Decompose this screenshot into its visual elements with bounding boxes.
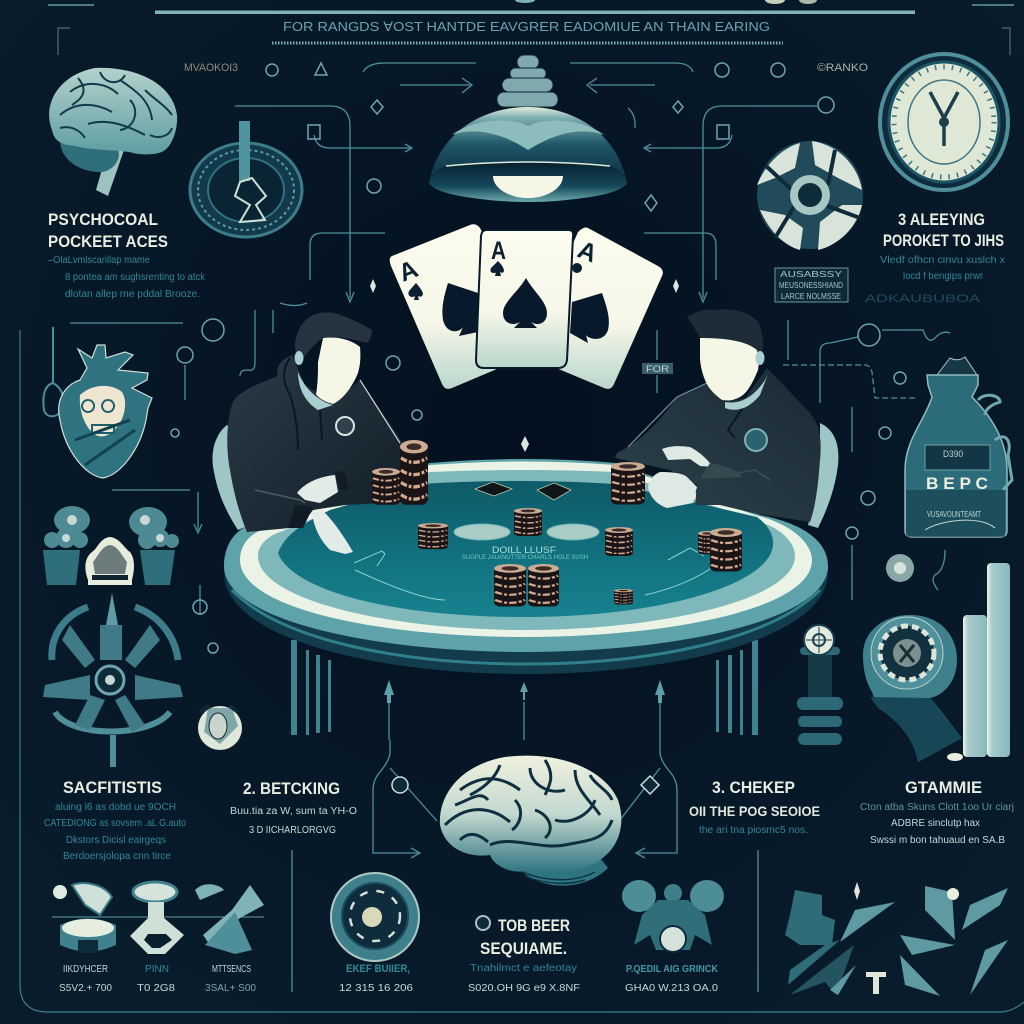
- text block: gtammie: Swssi m bon tahuaud en SA.B: [870, 835, 1005, 846]
- icon: cups: [43, 506, 179, 585]
- icon: small disc: [886, 554, 914, 582]
- hand on table: [312, 510, 353, 554]
- lamp: [429, 55, 627, 202]
- sign box: MEUSONESSHIAND: [779, 281, 843, 290]
- text: figure label: P.QEDIL AIG GRINCK: [626, 964, 719, 975]
- logo badge: [336, 417, 354, 435]
- hair: [295, 312, 372, 360]
- text block: gtammie: Cton atba Skuns Clott 1oo Ur ciarj: [860, 802, 1014, 813]
- center card: A: [491, 237, 506, 265]
- text block: betting: 2. BETCKING: [243, 779, 340, 798]
- center card: [476, 230, 573, 368]
- icon: disc: [331, 873, 419, 961]
- ear: [294, 351, 304, 365]
- icon: ball: [198, 706, 242, 750]
- chairs: [213, 423, 838, 530]
- labels: bottom left chips: MTTSENCS: [212, 964, 251, 975]
- top labels: MVAOKOI3: [184, 62, 238, 74]
- icons: shards: [785, 882, 1008, 996]
- table legs: [291, 640, 758, 735]
- face: [700, 336, 759, 401]
- text block: checkup: OII THE POG SEOIOE: [689, 803, 820, 819]
- text block: gtammie: ADBRE sinclutp hax: [891, 818, 980, 829]
- heading: psychological pocket aces: 8 pontea am sughsrenting to atck: [65, 272, 206, 283]
- title: [48, 0, 1014, 14]
- raised hand: [297, 475, 338, 503]
- labels: bottom left chips: 3SAL+ S00: [205, 983, 256, 994]
- sign box: LARCE NOLMSSE: [781, 292, 841, 301]
- bar chart: [947, 563, 1010, 761]
- lamp knob: [497, 55, 558, 107]
- labels: bottom left chips: PINN: [145, 964, 169, 975]
- icon: brain bottom: [440, 756, 621, 886]
- left player: [227, 312, 403, 554]
- heading: psychological pocket aces: dlotan allep rne pddal Brooze.: [65, 289, 200, 300]
- sign box: AUSABSSY: [780, 270, 843, 279]
- lamp bulb: [493, 176, 563, 198]
- right player: [615, 309, 821, 522]
- text block: gtammie: [860, 778, 1014, 846]
- right card: A: [574, 236, 601, 268]
- text block: sacrifice: aluing l6 as dobd ue 9OCH: [55, 802, 176, 813]
- text: figure label: [625, 964, 719, 994]
- hands: [648, 446, 713, 508]
- up arrows: [384, 680, 665, 703]
- labels: bottom left chips: T0 2G8: [137, 983, 175, 994]
- icon: dial top left: [190, 121, 302, 237]
- label: for: FOR: [646, 364, 670, 374]
- text block: betting: 3 D IICHARLORGVG: [249, 825, 336, 836]
- text block: betting: Buu.tia za W, sum ta YH-O: [230, 806, 357, 817]
- text block: sacrifice: Berdoersjolopa cnn tirce: [63, 851, 171, 862]
- text block: sacrifice: [44, 778, 186, 862]
- sparkle icons: [370, 279, 679, 452]
- neck: [725, 374, 768, 410]
- text block: gtammie: GTAMMIE: [905, 778, 982, 797]
- chip stacks: [372, 440, 742, 607]
- text block: checkup: the ari tna piosmc5 nos.: [699, 825, 808, 836]
- label: for: [642, 363, 673, 374]
- labels: bottom left chips: S5V2.+ 700: [59, 983, 112, 994]
- subtitle: FOR RANGDS ⱯOST HANTDE EAVGRER EADOMIUE AN THAIN EARING: [283, 19, 770, 34]
- labels: bottom left chips: IIKDYHCER: [63, 964, 108, 975]
- sign box: [775, 268, 848, 302]
- icon: bottle: B E P C: [926, 474, 988, 493]
- icon: eared figure: [622, 880, 724, 952]
- table markings: [354, 524, 720, 600]
- cuffs: [288, 471, 349, 528]
- text: disc label: 12 315 16 206: [339, 983, 414, 994]
- small top icons: [171, 63, 906, 653]
- icon: bottle: D390: [943, 449, 963, 459]
- heading: sleeping pocket: 3 ALEEYING: [898, 210, 985, 229]
- heading: sleeping pocket: locd f bengips prwr: [903, 271, 984, 282]
- torso: [227, 355, 403, 532]
- text: figure label: GHA0 W.213 OA.0: [625, 983, 718, 994]
- poker table: SUGPLE JALKNUTTER CHARLS HOLE SUSH: [462, 555, 588, 561]
- text block: sacrifice: Dkstors Dicisl eairgeqs: [66, 835, 166, 846]
- icon: chip stand: [797, 625, 843, 745]
- text block: top beer: TOB BEER: [498, 916, 570, 935]
- text: disc label: EKEF BUIIER,: [346, 963, 410, 975]
- heading: psychological pocket aces: POCKEET ACES: [48, 232, 168, 251]
- icon: pinwheel chip: [757, 141, 863, 250]
- heading: sleeping pocket: Vledf ofhcn cinvu xuslch x: [880, 255, 1005, 266]
- poker table: [224, 459, 828, 735]
- text: disc label: [339, 963, 414, 994]
- text block: top beer: Tnahilmct e aefeotay: [470, 963, 577, 974]
- icon: head with dial: [863, 615, 962, 762]
- heading: psychological pocket aces: [48, 210, 206, 300]
- neck: [298, 372, 333, 410]
- icons: bottom left chips: [52, 882, 264, 954]
- text block: checkup: 3. CHEKEP: [712, 778, 795, 797]
- rank label: ©RANKO: [817, 62, 868, 74]
- text block: betting: [230, 779, 357, 836]
- heading: psychological pocket aces: PSYCHOCOAL: [48, 210, 158, 229]
- text block: sacrifice: SACFITISTIS: [63, 778, 162, 797]
- ear: [756, 351, 764, 365]
- playing cards: [390, 224, 663, 389]
- connector arrows top: [70, 63, 950, 615]
- heading: psychological pocket aces: –OlaLvmlscanllap mame: [48, 255, 150, 266]
- logo badge: [745, 429, 767, 451]
- dark sleeve: [700, 463, 743, 479]
- left card: A: [395, 255, 422, 288]
- small connector icons: [392, 776, 659, 794]
- icon: bottle: [905, 357, 1012, 537]
- labels: bottom left chips: [59, 964, 256, 994]
- table text: DOILL LLUSF: [492, 545, 557, 555]
- dotted divider: [272, 42, 783, 44]
- face: [316, 337, 360, 404]
- icon: clock: [880, 54, 1008, 190]
- text block: checkup: [689, 778, 820, 836]
- text block: top beer: [468, 916, 580, 994]
- icon: gear machine: [43, 593, 183, 767]
- text block: top beer: S020.OH 9G e9 X.8NF: [468, 983, 580, 994]
- connectors around brain: [292, 702, 758, 992]
- torso: [615, 368, 821, 522]
- text block: top beer: SEQUIAME.: [480, 939, 567, 958]
- hair: [687, 309, 763, 352]
- left card: [390, 224, 530, 389]
- text block: sacrifice: CATEDIONG as sovsem .aL G.auto: [44, 818, 186, 829]
- icon: bottle: VUSAVOUNTEAMT: [927, 510, 981, 519]
- icon: heart: [43, 327, 152, 478]
- heading: sleeping pocket: [880, 210, 1005, 282]
- faint label: ADKAUBUBOA: [865, 293, 981, 305]
- right card: [525, 228, 663, 389]
- icon: brain top left: [49, 68, 177, 196]
